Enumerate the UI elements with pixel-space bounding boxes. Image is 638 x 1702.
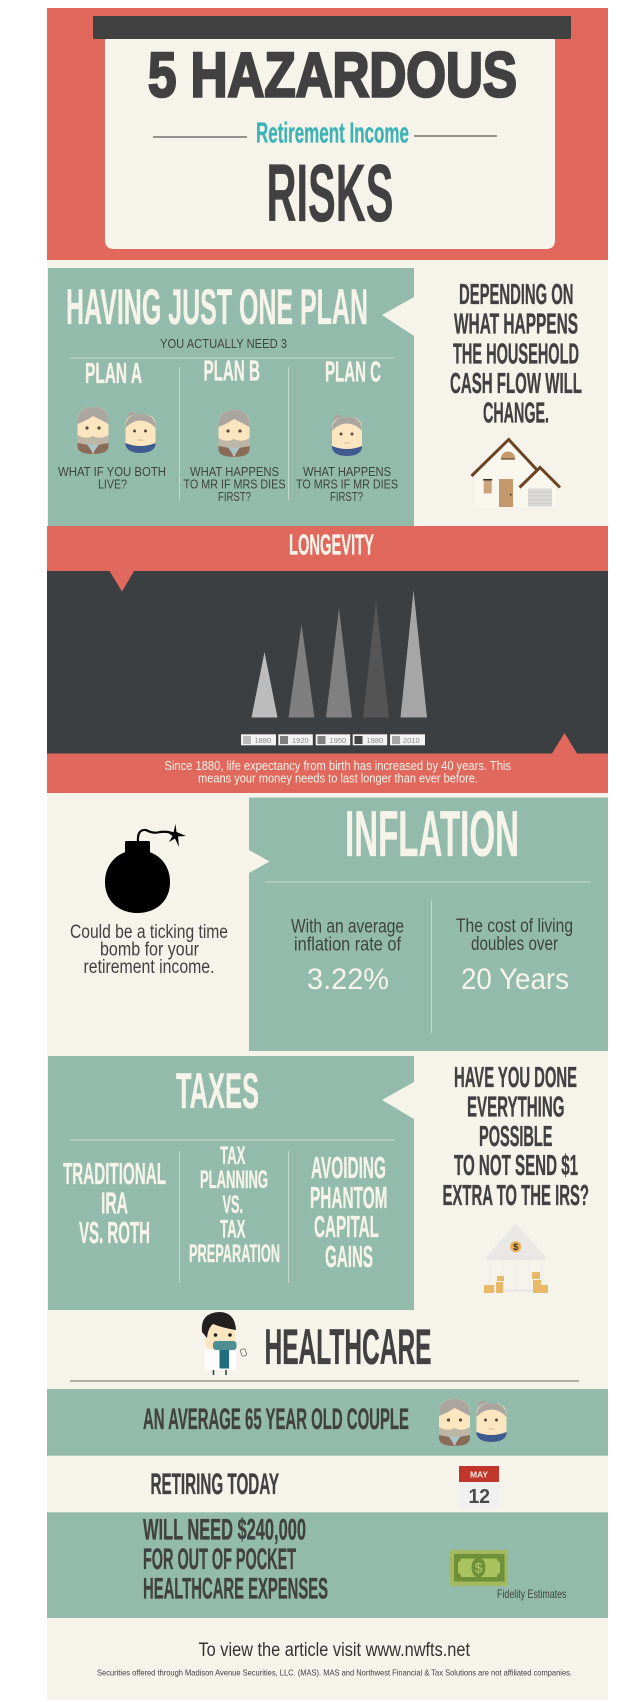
column: plan c <box>296 356 398 504</box>
chart legend: 2010 <box>403 736 420 745</box>
chart: life expectancy cones <box>252 590 427 718</box>
chart legend: 1980 <box>366 736 383 745</box>
band: retiring today: RETIRING TODAY <box>150 1468 279 1501</box>
chart legend: 1880 <box>254 736 271 745</box>
text: irs question: POSSIBLE <box>479 1121 552 1153</box>
band: out of pocket expenses: HEALTHCARE EXPENSES <box>143 1573 328 1606</box>
band: out of pocket expenses: WILL NEED $240,000 <box>143 1513 306 1546</box>
icon: dollar bill: $ <box>475 1560 483 1576</box>
text: ticking time bomb <box>70 922 228 978</box>
longevity caption: means your money needs to last longer than ever before. <box>198 772 478 786</box>
icon: bank with coins <box>484 1224 548 1293</box>
icon: bank with coins: $ <box>513 1242 518 1252</box>
band: average couple <box>47 1389 608 1456</box>
band: out of pocket expenses: FOR OUT OF POCKET <box>143 1543 296 1576</box>
callout pointer: down <box>110 571 134 592</box>
column: plan a: LIVE? <box>98 476 127 492</box>
column: planning vs preparation: TAX <box>220 1216 246 1244</box>
column: planning vs preparation: PLANNING <box>200 1166 268 1194</box>
panel: inflation <box>249 797 608 1051</box>
text: ticking time bomb: Could be a ticking time <box>70 922 228 943</box>
text: ticking time bomb: retirement income. <box>84 957 214 978</box>
column: plan b <box>184 356 286 504</box>
text: irs question <box>442 1062 589 1212</box>
stat: doubling time: 20 Years <box>461 963 569 996</box>
icon: calendar: 12 <box>468 1486 490 1508</box>
longevity caption <box>164 759 511 786</box>
longevity caption: Since 1880, life expectancy from birth has increased by 40 years. This <box>164 759 511 773</box>
icon: doctor <box>202 1312 247 1375</box>
title card <box>105 30 555 249</box>
band: retiring today <box>150 1466 499 1508</box>
heading: longevity: LONGEVITY <box>289 529 374 561</box>
stat: doubling time: doubles over <box>471 934 559 955</box>
band: out of pocket expenses <box>47 1512 608 1618</box>
footer: Securities offered through Madison Avenue Securities, LLC. (MAS). MAS and Northwest Financial & Tax Solutions are not affiliated companies. <box>97 1668 572 1678</box>
column: plan b: TO MR IF MRS DIES <box>184 476 286 492</box>
column: phantom gains: AVOIDING <box>311 1150 386 1185</box>
column: plan a: PLAN A <box>85 358 142 390</box>
column: ira vs roth: VS. ROTH <box>79 1215 150 1250</box>
dark header bar <box>93 16 571 39</box>
heading: taxes: TAXES <box>176 1063 259 1119</box>
column: plan a <box>58 358 166 492</box>
column: planning vs preparation: TAX <box>220 1142 246 1170</box>
stat: inflation rate: With an average <box>291 916 404 938</box>
stat: doubling time <box>456 916 573 996</box>
column: plan c: TO MRS IF MR DIES <box>296 476 398 492</box>
icon: house <box>472 440 560 507</box>
icon: dollar bill <box>450 1550 508 1586</box>
footer <box>97 1640 572 1678</box>
text: household cash flow note: CHANGE. <box>483 398 549 430</box>
column: planning vs preparation: PREPARATION <box>189 1240 280 1268</box>
panel: having just one plan <box>48 268 414 526</box>
column: phantom gains: CAPITAL <box>314 1209 379 1244</box>
column: plan c: PLAN C <box>325 356 381 388</box>
subtitle: retirement income: Retirement Income <box>256 118 409 150</box>
panel: taxes: PHANTOM <box>310 1180 388 1215</box>
stat: inflation rate <box>291 916 404 996</box>
column: ira vs roth: IRA <box>101 1186 128 1220</box>
column: plan a: WHAT IF YOU BOTH <box>58 464 166 479</box>
column: planning vs preparation: VS. <box>222 1191 243 1219</box>
column: phantom gains: GAINS <box>325 1239 373 1274</box>
panel: title banner <box>47 8 608 260</box>
icon: calendar: MAY <box>470 1470 488 1480</box>
icon: calendar <box>459 1466 499 1508</box>
callout pointer: up <box>552 733 577 754</box>
column: plan b: FIRST? <box>218 489 251 504</box>
footer: To view the article visit www.nwfts.net <box>198 1640 471 1661</box>
subheading: YOU ACTUALLY NEED 3 <box>160 336 287 351</box>
column: ira vs roth <box>63 1156 166 1250</box>
text: HEALTHCARE <box>264 1319 432 1375</box>
icon: bomb <box>105 824 186 913</box>
text: household cash flow note <box>450 279 582 430</box>
stat: inflation rate: inflation rate of <box>294 934 402 956</box>
chart legend: 1950 <box>330 736 346 745</box>
chart legend <box>241 734 425 745</box>
column: planning vs preparation <box>189 1142 280 1268</box>
chart legend: 1920 <box>292 736 309 745</box>
panel: longevity <box>47 526 608 793</box>
panel: taxes: TRADITIONAL <box>63 1156 166 1191</box>
stat: doubling time: The cost of living <box>456 916 573 937</box>
column: plan c: WHAT HAPPENS <box>303 464 391 479</box>
text: ticking time bomb: bomb for your <box>100 940 200 960</box>
column: plan b: WHAT HAPPENS <box>190 464 279 479</box>
source note: Fidelity Estimates <box>497 1587 566 1601</box>
column: phantom gains <box>310 1150 388 1274</box>
title: 5 hazardous: 5 HAZARDOUS <box>148 40 517 110</box>
panel: taxes <box>48 1056 414 1310</box>
stat: inflation rate: 3.22% <box>307 963 389 996</box>
title: risks: RISKS <box>266 148 394 239</box>
column: plan b: PLAN B <box>204 356 260 388</box>
column: plan c: FIRST? <box>330 489 363 504</box>
